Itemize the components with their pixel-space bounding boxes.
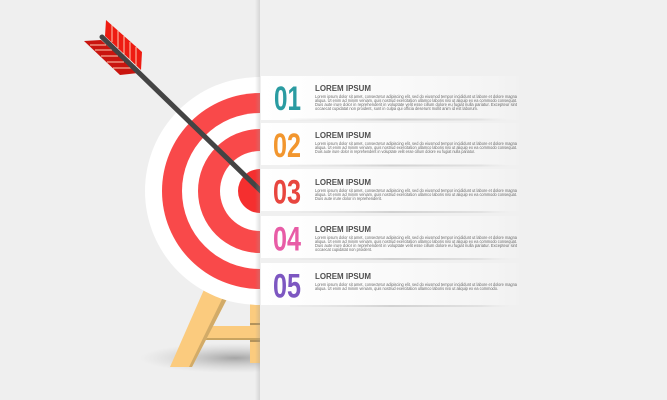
heading: LOREM IPSUM — [315, 224, 371, 234]
body text: aliqua. Ut enim ad minim veniam, quis nostrud exercitation ullamco laboris nisi ut aliquip ex ea commodo consequat. — [315, 145, 517, 150]
strip — [261, 263, 519, 305]
number: 03 — [273, 174, 301, 212]
item 01 — [261, 76, 519, 120]
paper panel — [255, 0, 667, 400]
arrow — [84, 20, 262, 192]
body text — [315, 282, 518, 291]
ground shadow — [140, 343, 330, 373]
strip — [261, 216, 519, 258]
arrow fletching — [84, 20, 142, 75]
body text: occaecat cupidatat non proident. — [315, 247, 372, 252]
arrow shaft — [102, 37, 262, 192]
easel rear leg — [250, 300, 262, 363]
body text: Lorem ipsum dolor sit amet, consectetur adipiscing elit, sed do eiusmod tempor incididunt ut labore et dolore magna — [315, 94, 518, 99]
body text: Lorem ipsum dolor sit amet, consectetur adipiscing elit, sed do eiusmod tempor incididunt ut labore et dolore magna — [315, 235, 518, 240]
easel front leg — [170, 285, 229, 367]
body text: Duis aute irure dolor in reprehenderit in voluptate velit esse cillum dolore eu fugiat nulla pariatur. — [315, 149, 475, 154]
body text — [315, 235, 518, 252]
easel crossbar — [206, 326, 262, 339]
heading: LOREM IPSUM — [315, 271, 371, 281]
strip — [261, 76, 519, 120]
heading: LOREM IPSUM — [315, 83, 371, 93]
body text — [315, 188, 518, 201]
number: 02 — [273, 127, 301, 165]
body text: Duis aute irure dolor in reprehenderit in voluptate velit esse cillum dolore eu fugiat nulla pariatur. Excepteur sint — [315, 243, 518, 248]
heading: LOREM IPSUM — [315, 130, 371, 140]
number: 04 — [273, 220, 301, 258]
number: 05 — [273, 268, 301, 306]
strip — [261, 169, 519, 211]
heading: LOREM IPSUM — [315, 177, 371, 187]
item 05 — [261, 263, 519, 307]
body text: Duis aute irure dolor in reprehenderit in voluptate velit esse cillum dolore eu fugiat nulla pariatur. Excepteur sint — [315, 102, 518, 107]
body text: aliqua. Ut enim ad minim veniam, quis nostrud exercitation ullamco laboris nisi ut aliquip ex ea commodo consequat. — [315, 98, 517, 103]
item 02 — [261, 123, 519, 166]
body text: aliqua. Ut enim ad minim veniam, quis nostrud exercitation ullamco laboris nisi ut aliquip ex ea commodo. — [315, 286, 498, 291]
easel stand — [170, 285, 262, 367]
item 04 — [261, 216, 519, 260]
body text: occaecat cupidatat non proident, sunt in culpa qui officia deserunt mollit anim id est laborum. — [315, 106, 478, 111]
target board — [145, 77, 373, 305]
body text — [315, 94, 518, 111]
body text: Lorem ipsum dolor sit amet, consectetur adipiscing elit, sed do eiusmod tempor incididunt ut labore et dolore magna — [315, 141, 518, 146]
body text: aliqua. Ut enim ad minim veniam, quis nostrud exercitation ullamco laboris nisi ut aliquip ex ea commodo consequat. — [315, 239, 517, 244]
item 03 — [261, 169, 519, 213]
strip — [261, 123, 519, 165]
body text: Lorem ipsum dolor sit amet, consectetur adipiscing elit, sed do eiusmod tempor incididunt ut labore et dolore magna — [315, 188, 518, 193]
number: 01 — [274, 80, 301, 118]
body text: aliqua. Ut enim ad minim veniam, quis nostrud exercitation ullamco laboris nisi ut aliquip ex ea commodo consequat. — [315, 192, 517, 197]
body text: Lorem ipsum dolor sit amet, consectetur adipiscing elit, sed do eiusmod tempor incididunt ut labore et dolore magna — [315, 282, 518, 287]
body text — [315, 141, 518, 154]
body text: Duis aute irure dolor in reprehenderit. — [315, 196, 382, 201]
